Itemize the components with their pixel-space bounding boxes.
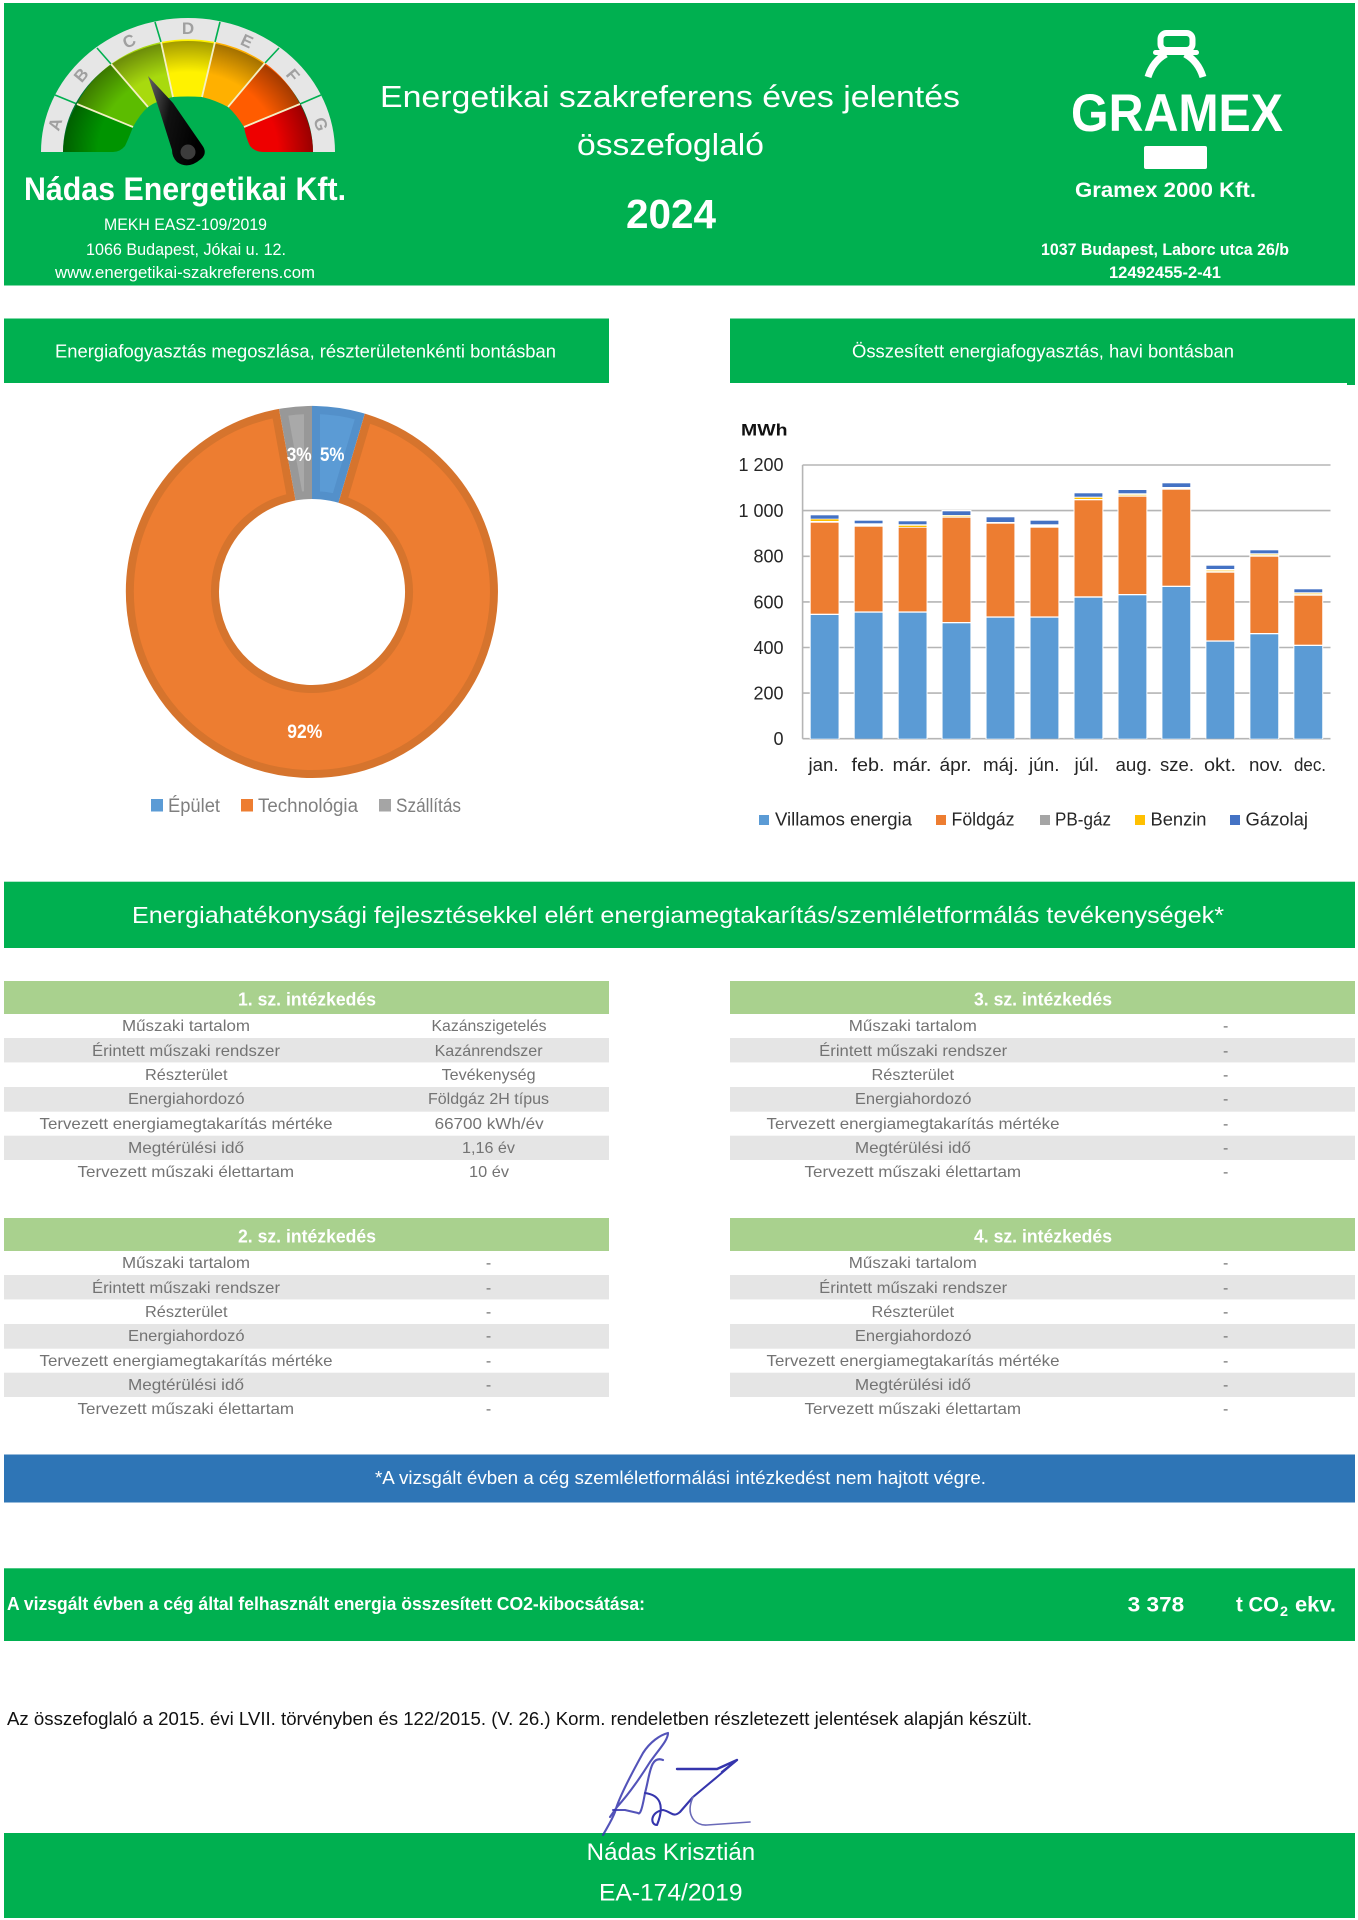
panel: measure 3 table: Műszaki tartalom: [849, 1018, 977, 1035]
logo: Gramex: [1071, 33, 1283, 169]
panel: CO2 emissions: A vizsgált évben a cég által felhasznált energia összesített CO2-kibocsátása:: [7, 1594, 645, 1614]
legend: bar chart: Villamos energia: [775, 810, 913, 830]
text: client address and tax number: [1041, 241, 1289, 282]
text: registration and contact details: 1066 Budapest, Jókai u. 12.: [86, 241, 286, 259]
panel: measure 3 table: -: [1223, 1116, 1228, 1133]
legend: donut chart: [151, 796, 461, 817]
panel: measure 3 table: Tervezett műszaki élettartam: [804, 1164, 1021, 1181]
heading: donut chart section: Energiafogyasztás megoszlása, részterületenkénti bontásban: [55, 340, 556, 362]
panel: measure 1 table: Kazánrendszer: [435, 1043, 543, 1060]
icon: energy rating gauge: G: [309, 115, 332, 133]
legend: bar chart: Földgáz: [952, 810, 1014, 830]
y axis labels: 1 000: [738, 501, 784, 521]
panel: measure 1 table: Kazánszigetelés: [432, 1018, 546, 1035]
panel: signature footer: Nádas Krisztián: [587, 1839, 755, 1866]
panel: measure 4 table: -: [1223, 1377, 1228, 1394]
panel: measure 4 table: Energiahordozó: [855, 1328, 972, 1345]
logo: Gramex: GRAMEX: [1071, 84, 1283, 143]
panel: measure 3 table: Megtérülési idő: [855, 1140, 971, 1157]
y axis labels: 0: [773, 729, 784, 749]
panel: measure 3 table: -: [1223, 1091, 1228, 1108]
panel: measure 3 table: -: [1223, 1164, 1228, 1181]
panel: measure 1 table: 10 év: [469, 1164, 509, 1181]
panel: measure 4 table: -: [1223, 1328, 1228, 1345]
CO2 unit: [1236, 1594, 1336, 1619]
CO2 unit: ekv.: [1295, 1594, 1336, 1616]
panel: measure 1 table: Földgáz 2H típus: [428, 1091, 549, 1108]
segment: Technológia 92%: [130, 414, 494, 774]
text: registration and contact details: [54, 216, 315, 282]
panel: signature footer: EA-174/2019: [599, 1880, 742, 1906]
y axis labels: 1 200: [738, 455, 784, 475]
panel: measure 1 table: Energiahordozó: [128, 1091, 245, 1108]
banner: energy saving activities heading: [4, 882, 1355, 948]
panel: signature footer: [4, 1833, 1355, 1918]
panel: measure 1 table: [4, 981, 609, 1181]
x axis month labels: sze.: [1160, 755, 1194, 775]
panel: measure 1 table: Érintett műszaki rendszer: [92, 1041, 281, 1060]
panel: measure 2 table: Műszaki tartalom: [122, 1255, 250, 1272]
panel: measure 2 table: -: [486, 1304, 491, 1321]
panel: measure 1 table: Tervezett műszaki élettartam: [78, 1164, 294, 1181]
panel: measure 1 table: Műszaki tartalom: [122, 1018, 250, 1035]
heading: donut chart section: [4, 318, 609, 383]
x axis month labels: ápr.: [940, 755, 972, 775]
panel: measure 1 table: Megtérülési idő: [128, 1140, 244, 1157]
value labels: [287, 445, 345, 743]
callout: awareness-raising note: *A vizsgált évben a cég szemléletformálási intézkedést nem hajtott végre.: [375, 1467, 986, 1488]
panel: measure 2 table: -: [486, 1377, 491, 1394]
legend: bar chart: Benzin: [1150, 810, 1206, 830]
x axis month labels: jan.: [807, 755, 838, 775]
panel: measure 1 table: Tevékenység: [442, 1067, 536, 1084]
panel: measure 4 table: -: [1223, 1353, 1228, 1370]
panel: measure 4 table: Részterület: [872, 1304, 955, 1321]
panel: measure 4 table: -: [1223, 1401, 1228, 1418]
axis unit: MWh: [741, 420, 788, 440]
panel: measure 3 table: [730, 981, 1355, 1181]
x axis month labels: nov.: [1249, 755, 1283, 775]
icon: energy rating gauge: [41, 18, 335, 165]
title: Energetikai szakreferens éves jelentés: [380, 79, 960, 114]
text: legal basis note: Az összefoglaló a 2015. évi LVII. törvényben és 122/2015. (V. 26.) Korm. rendeletben részletezett jelentések alapján készült.: [7, 1709, 1032, 1729]
panel: measure 4 table: 4. sz. intézkedés: [974, 1226, 1112, 1246]
panel: measure 2 table: Részterület: [145, 1304, 228, 1321]
year: 2024: [626, 191, 716, 237]
x axis month labels: júl.: [1073, 755, 1099, 775]
panel: measure 4 table: Megtérülési idő: [855, 1377, 971, 1394]
y axis labels: 600: [753, 592, 784, 612]
icon: energy rating gauge: A: [45, 115, 66, 133]
panel: measure 3 table: -: [1223, 1067, 1228, 1084]
panel: measure 1 table: 66700 kWh/év: [435, 1116, 544, 1133]
value labels: 5%: [320, 445, 345, 466]
y axis labels: 400: [753, 638, 784, 658]
panel: measure 2 table: Tervezett energiamegtakarítás mértéke: [40, 1353, 333, 1370]
panel: measure 3 table: -: [1223, 1018, 1228, 1035]
panel: measure 3 table: Érintett műszaki rendszer: [819, 1041, 1008, 1060]
panel: measure 4 table: -: [1223, 1280, 1228, 1297]
panel: measure 2 table: -: [486, 1328, 491, 1345]
panel: measure 2 table: 2. sz. intézkedés: [238, 1226, 376, 1246]
panel: measure 1 table: 1,16 év: [462, 1140, 515, 1157]
panel: measure 3 table: -: [1223, 1140, 1228, 1157]
panel: header banner: [4, 3, 1355, 286]
segment: Épület 5%: [316, 410, 360, 498]
panel: measure 2 table: Megtérülési idő: [128, 1377, 244, 1394]
text: client address and tax number: 1037 Budapest, Laborc utca 26/b: [1041, 241, 1289, 259]
donut chart: consumption by area: [130, 410, 494, 774]
panel: measure 3 table: -: [1223, 1043, 1228, 1060]
title: összefoglaló: [577, 127, 764, 162]
x axis month labels: dec.: [1294, 755, 1326, 775]
title: [380, 79, 960, 162]
panel: measure 1 table: 1. sz. intézkedés: [238, 988, 376, 1010]
legend: donut chart: Épület: [168, 796, 221, 817]
company name: Nádas Energetikai Kft.: Nádas Energetikai Kft.: [24, 171, 346, 207]
icon: energy rating gauge: F: [282, 65, 303, 85]
panel: measure 4 table: Tervezett energiamegtakarítás mértéke: [766, 1353, 1060, 1370]
x axis month labels: [807, 755, 1326, 775]
panel: measure 1 table: Részterület: [145, 1067, 228, 1084]
panel: measure 2 table: Tervezett műszaki élettartam: [78, 1401, 294, 1418]
icon: energy rating gauge: D: [182, 19, 194, 38]
x axis month labels: jún.: [1028, 755, 1060, 775]
panel: measure 2 table: Energiahordozó: [128, 1328, 245, 1345]
icon: energy rating gauge: E: [238, 30, 256, 52]
y axis labels: [738, 455, 784, 749]
text: registration and contact details: www.energetikai-szakreferens.com: [54, 264, 315, 282]
panel: measure 3 table: Tervezett energiamegtakarítás mértéke: [766, 1116, 1060, 1133]
legend: bar chart: PB-gáz: [1055, 810, 1111, 830]
client name: Gramex 2000 Kft.: Gramex 2000 Kft.: [1075, 178, 1256, 202]
y axis labels: 200: [753, 684, 784, 704]
panel: measure 1 table: Tervezett energiamegtakarítás mértéke: [40, 1116, 333, 1133]
CO2 unit: t CO: [1236, 1594, 1279, 1616]
panel: CO2 emissions: [4, 1568, 1355, 1641]
x axis month labels: máj.: [983, 755, 1018, 775]
heading: bar chart section: Összesített energiafogyasztás, havi bontásban: [852, 340, 1234, 362]
x axis month labels: aug.: [1116, 755, 1152, 775]
panel: measure 4 table: Műszaki tartalom: [849, 1255, 977, 1272]
text: registration and contact details: MEKH EASZ-109/2019: [104, 216, 267, 234]
y axis labels: 800: [753, 546, 784, 566]
panel: measure 2 table: [4, 1218, 609, 1418]
callout: awareness-raising note: [4, 1454, 1355, 1502]
bar chart: monthly energy consumption: [738, 420, 1330, 775]
panel: measure 2 table: -: [486, 1353, 491, 1370]
panel: measure 2 table: -: [486, 1401, 491, 1418]
segment: Szállítás 3%: [284, 410, 308, 496]
icon: energy rating gauge: C: [120, 30, 139, 53]
text: client address and tax number: 12492455-2-41: [1109, 264, 1221, 282]
legend: donut chart: Technológia: [258, 796, 358, 817]
panel: measure 4 table: -: [1223, 1304, 1228, 1321]
panel: measure 4 table: Tervezett műszaki élettartam: [804, 1401, 1021, 1418]
panel: measure 3 table: 3. sz. intézkedés: [974, 988, 1112, 1010]
stacked bars: [810, 482, 1323, 739]
legend: bar chart: [759, 810, 1308, 830]
CO2 value: 3 378: [1128, 1594, 1185, 1616]
value labels: 92%: [287, 722, 322, 743]
banner: energy saving activities heading: Energiahatékonysági fejlesztésekkel elért energiamegtakarítás/szemléletformálás tevékenységek*: [132, 902, 1224, 928]
x axis month labels: feb.: [852, 755, 884, 775]
legend: bar chart: Gázolaj: [1246, 810, 1308, 830]
panel: measure 4 table: Érintett műszaki rendszer: [819, 1278, 1008, 1297]
panel: measure 4 table: [730, 1218, 1355, 1418]
CO2 unit: 2: [1280, 1603, 1288, 1619]
panel: measure 3 table: Részterület: [872, 1067, 955, 1084]
icon: energy rating gauge: B: [70, 65, 93, 86]
panel: measure 2 table: -: [486, 1255, 491, 1272]
x axis month labels: okt.: [1204, 755, 1236, 775]
x axis month labels: már.: [892, 755, 932, 775]
icon: handwritten signature: [603, 1733, 750, 1835]
panel: measure 2 table: Érintett műszaki rendszer: [92, 1278, 281, 1297]
value labels: 3%: [287, 445, 312, 466]
panel: measure 4 table: -: [1223, 1255, 1228, 1272]
panel: measure 3 table: Energiahordozó: [855, 1091, 972, 1108]
panel: measure 2 table: -: [486, 1280, 491, 1297]
legend: donut chart: Szállítás: [396, 796, 461, 817]
heading: bar chart section: [730, 318, 1355, 385]
